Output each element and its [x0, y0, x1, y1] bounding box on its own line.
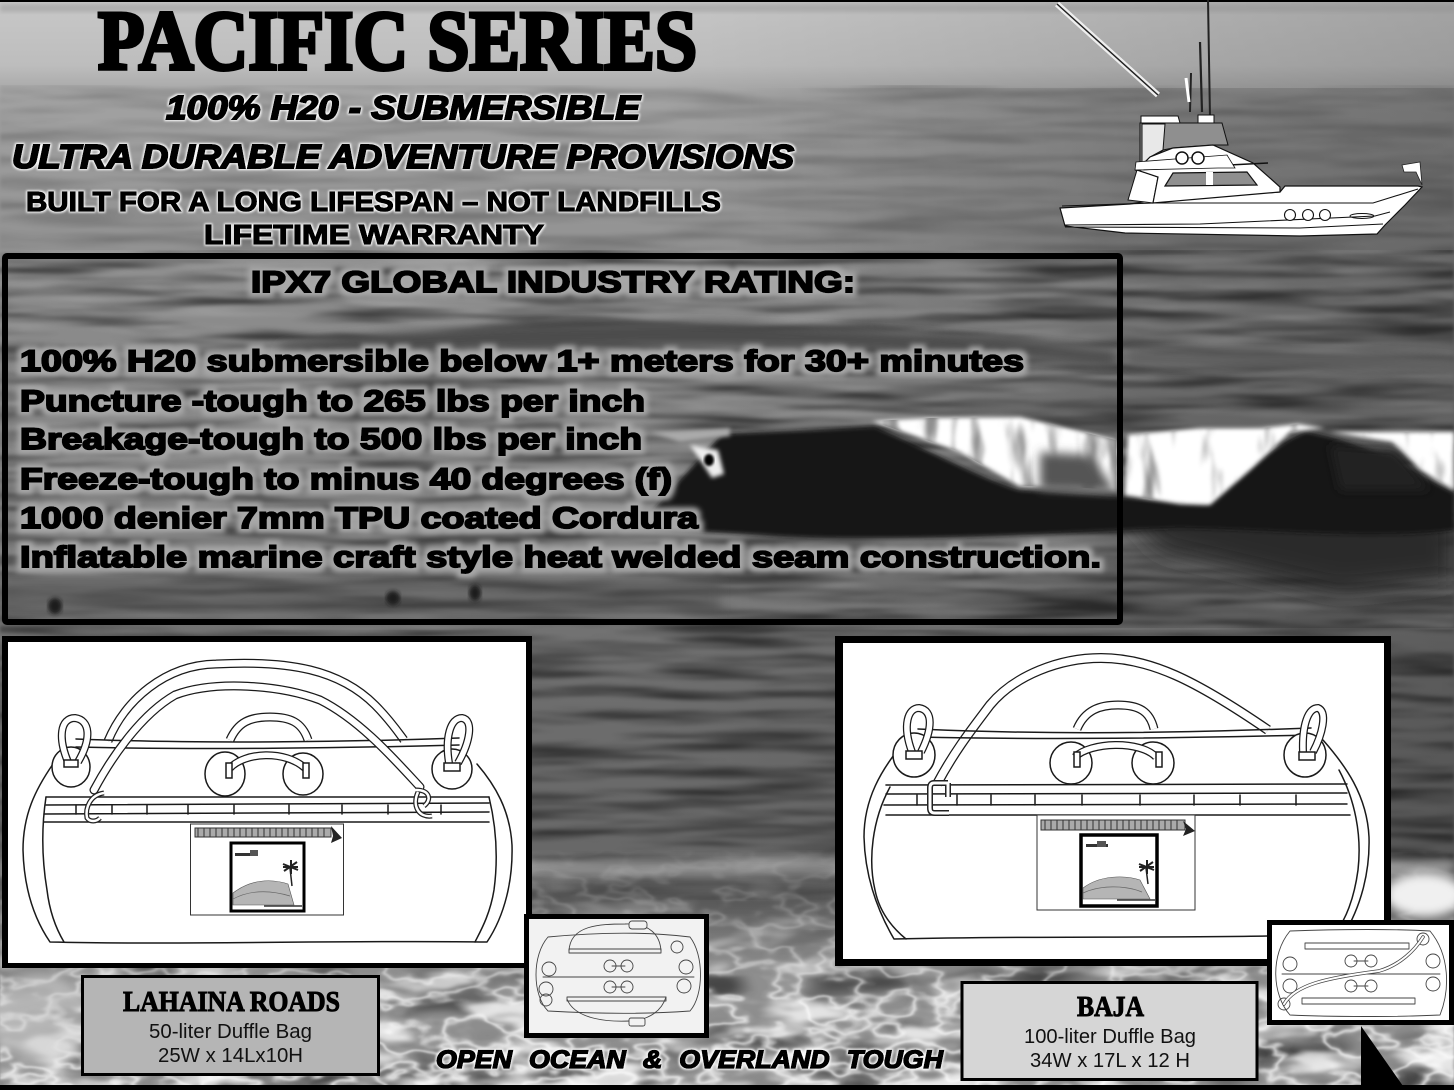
caption: Lahaina Roads — [82, 976, 378, 1074]
bag handles and patches — [893, 705, 1326, 813]
shoreline foam — [0, 850, 1454, 1090]
slogan: OPEN OCEAN & OVERLAND TOUGH — [436, 1046, 944, 1074]
caption: Lahaina Roads: 50-liter Duffle Bag — [149, 1021, 312, 1043]
specification list: 1000 denier 7mm TPU coated Cordura — [20, 502, 698, 535]
panel heading: IPX7 GLOBAL INDUSTRY RATING: — [251, 266, 855, 299]
specification list: Inflatable marine craft style heat welded seam construction. — [20, 541, 1101, 574]
tagline: lifespan and warranty: BUILT FOR A LONG LIFESPAN – NOT LANDFILLS — [26, 186, 721, 217]
caption: Lahaina Roads: 25W x 14Lx10H — [158, 1045, 303, 1067]
bag shoulder straps — [108, 663, 404, 741]
caption: Lahaina Roads: LAHAINA ROADS — [123, 986, 340, 1018]
specification list — [20, 345, 1101, 574]
subheading: adventure provisions: ULTRA DURABLE ADVENTURE PROVISIONS — [12, 138, 794, 175]
panel: Lahaina Roads duffle drawing — [2, 636, 532, 968]
bag logo label — [1081, 835, 1157, 906]
wave barrel — [1120, 505, 1454, 592]
specification list: Breakage-tough to 500 lbs per inch — [20, 423, 642, 456]
tagline: lifespan and warranty: LIFETIME WARRANTY — [204, 219, 544, 250]
inset: Lahaina Roads top view — [526, 916, 706, 1036]
specification list: Freeze-tough to minus 40 degrees (f) — [20, 463, 672, 496]
caption: Baja — [962, 982, 1257, 1080]
specification list: Puncture -tough to 265 lbs per inch — [20, 385, 645, 418]
caption: Baja: 34W x 17L x 12 H — [1030, 1050, 1190, 1072]
caption: Baja: BAJA — [1077, 991, 1144, 1023]
bag handles and patches — [52, 717, 472, 821]
second strap crossing the bag — [94, 686, 420, 790]
bag body outline — [23, 738, 512, 943]
surfers in the water — [48, 585, 481, 614]
caption: Baja: 100-liter Duffle Bag — [1024, 1026, 1196, 1048]
inset: Baja top view — [1270, 922, 1452, 1022]
bag logo label — [231, 843, 304, 911]
bag body outline — [864, 728, 1369, 939]
icon: sport fishing boat — [1057, 0, 1422, 236]
tagline: lifespan and warranty — [26, 186, 721, 250]
bag shoulder strap — [937, 658, 1268, 784]
dark fin shape — [1361, 1026, 1403, 1086]
bag front pocket with zipper — [190, 824, 344, 915]
panel: Baja duffle drawing — [835, 636, 1391, 966]
breaking foam — [650, 410, 1454, 510]
panel: IPX7 rating — [5, 256, 1120, 622]
bag front pocket with zipper — [1037, 815, 1195, 910]
specification list: 100% H20 submersible below 1+ meters for 30+ minutes — [20, 345, 1024, 378]
subheading: submersible: 100% H20 - SUBMERSIBLE — [166, 89, 641, 126]
